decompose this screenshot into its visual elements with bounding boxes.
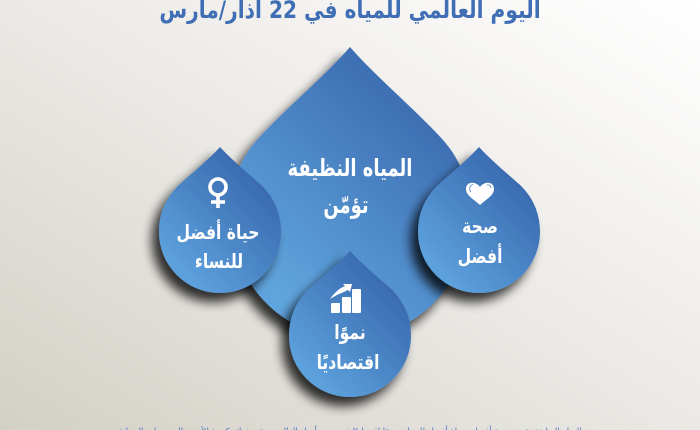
bottom drop text: نموًا: [334, 321, 366, 345]
large drop: clean water: [230, 47, 470, 338]
left drop text: للنساء: [195, 250, 243, 274]
left drop text: [177, 219, 259, 274]
right drop text: أفضل: [458, 243, 502, 269]
bottom drop text: [317, 321, 379, 375]
right drop: health: [418, 147, 540, 293]
main drop text: [288, 155, 412, 220]
bottom drop: economic growth: [289, 251, 411, 397]
bottom drop text: اقتصاديًا: [317, 351, 379, 375]
main drop text: تؤمّن: [323, 192, 369, 220]
left drop: women: [159, 147, 281, 293]
right drop text: صحة: [462, 215, 498, 239]
left drop text: حياة أفضل: [177, 219, 259, 245]
icon: female symbol: [210, 179, 226, 208]
icon: heart with highlights: [466, 183, 494, 205]
right drop text: [458, 215, 502, 269]
main drop text: المياه النظيفة: [288, 155, 412, 183]
icon: rising bar chart with arrow: [330, 284, 361, 313]
